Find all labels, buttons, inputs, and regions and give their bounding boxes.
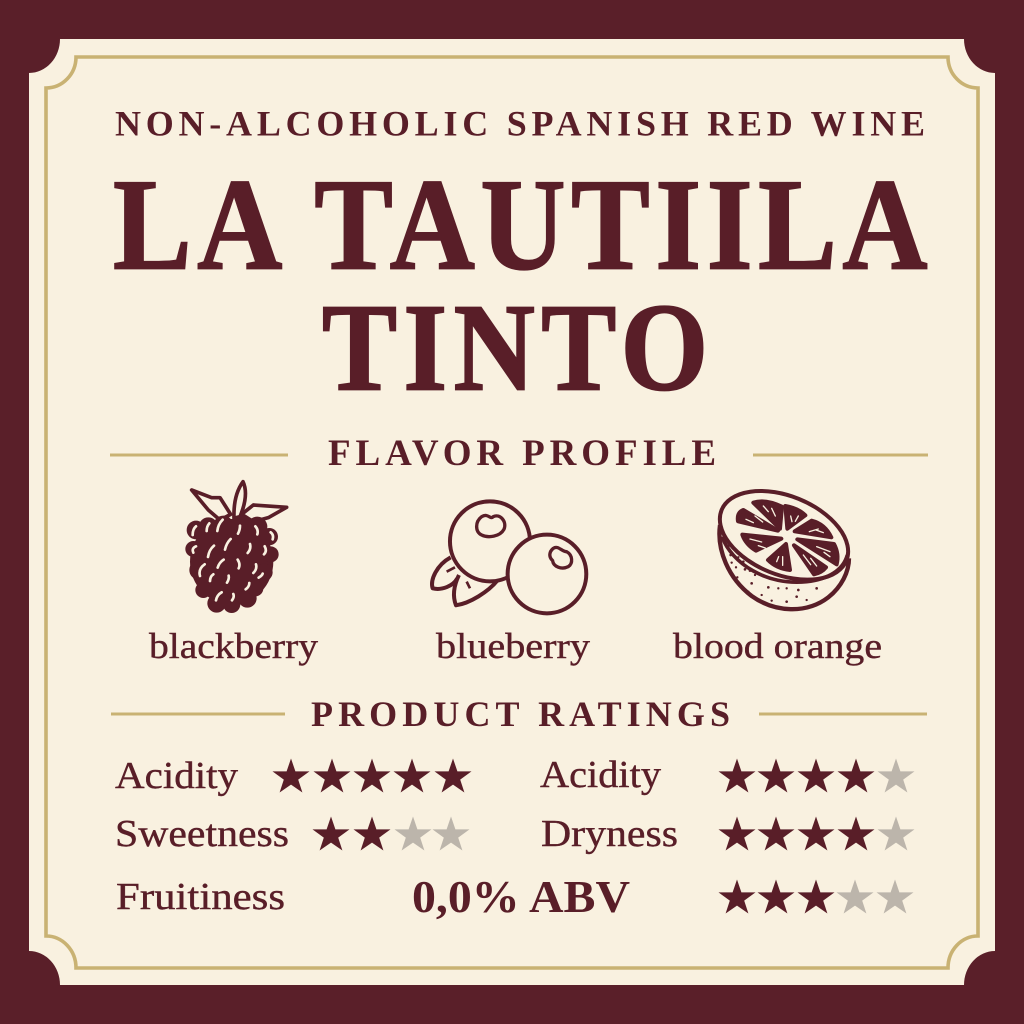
- berry highlights: [193, 520, 273, 600]
- rating: dryness: [541, 813, 914, 855]
- flavor labels: [149, 626, 882, 666]
- title: LA TAUTIILA: [113, 152, 928, 297]
- rating: fruitiness stars: [718, 880, 914, 914]
- rating: acidity right: [540, 754, 914, 796]
- rating: acidity right: Acidity: [540, 754, 661, 796]
- rating: acidity left: [115, 755, 472, 797]
- berry body: [185, 515, 279, 613]
- flavor labels: blood orange: [673, 626, 882, 666]
- flavor labels: blueberry: [436, 626, 590, 666]
- rating: acidity left: Acidity: [115, 755, 238, 797]
- heading: flavor profile: FLAVOR PROFILE: [328, 433, 716, 474]
- rating: fruitiness label: Fruitiness: [116, 876, 285, 918]
- leaves: [192, 482, 287, 522]
- title: [113, 152, 928, 417]
- rating: dryness: Dryness: [541, 813, 678, 855]
- segments: [738, 501, 838, 574]
- rating: sweetness: [115, 813, 470, 855]
- icon: blueberries: [432, 501, 586, 613]
- title: TINTO: [322, 278, 708, 417]
- rind dots: [727, 545, 818, 603]
- abv: 0,0% ABV: [412, 872, 630, 922]
- heading: product ratings: PRODUCT RATINGS: [311, 694, 730, 734]
- icon: blood orange: [707, 474, 861, 609]
- subtitle: NON-ALCOHOLIC SPANISH RED WINE: [115, 104, 925, 144]
- flavor labels: blackberry: [149, 626, 318, 666]
- icon: blackberry: [185, 482, 287, 613]
- rating: sweetness: Sweetness: [115, 813, 289, 855]
